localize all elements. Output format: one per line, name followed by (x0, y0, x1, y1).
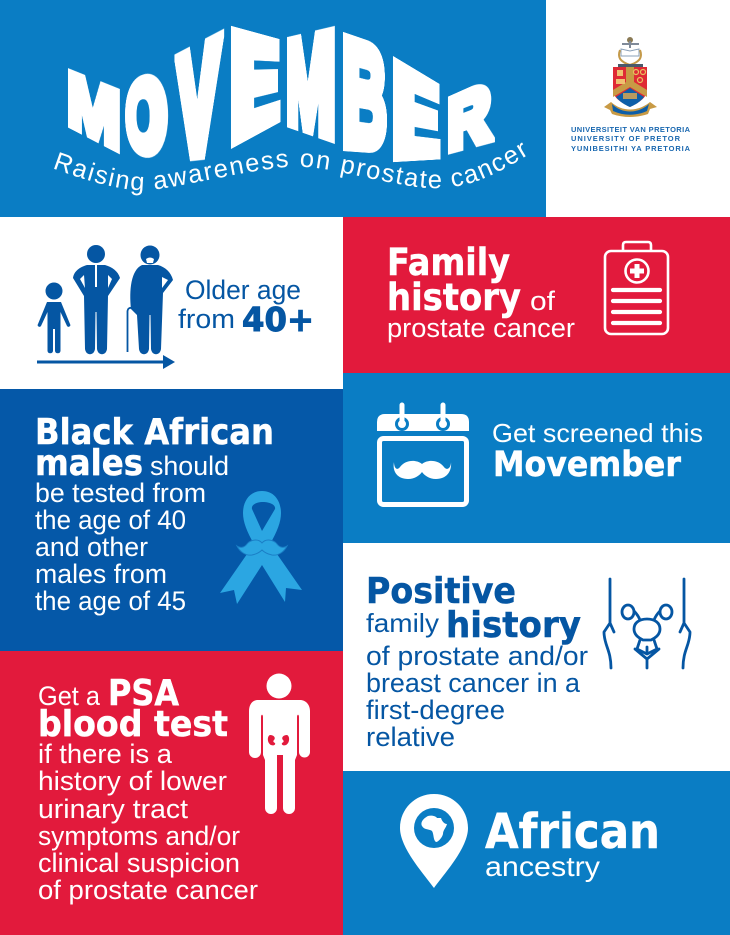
panel: university logo (546, 0, 730, 217)
text: testing age guidance: Black African (35, 412, 274, 453)
title: MOVEMBER warped lettering: M (67, 56, 121, 169)
text: first-degree relative: Positive (366, 571, 516, 612)
logo text: YUNIBESITHI YA PRETORIA (571, 144, 691, 153)
text: family history of prostate cancer: history (387, 276, 521, 319)
text: testing age guidance: the age of 45 (35, 586, 186, 616)
text: psa guidance: symptoms and/or (38, 821, 240, 851)
logo text (571, 125, 691, 153)
title: MOVEMBER warped lettering: R (448, 66, 490, 165)
text: psa guidance: PSA (108, 673, 179, 714)
text: older age from 40+: 40+ (242, 300, 314, 339)
title: MOVEMBER warped lettering: M (286, 0, 336, 169)
panel: black african males (0, 389, 343, 651)
text: first-degree relative: of prostate and/or (366, 641, 588, 671)
icon: map pin with africa (400, 794, 468, 888)
text: first-degree relative: breast cancer in a (366, 668, 581, 698)
text: psa guidance: urinary tract (38, 794, 189, 824)
text: psa guidance: if there is a (38, 739, 173, 769)
text: testing age guidance (35, 412, 274, 616)
text: get screened this movember (492, 418, 703, 485)
panel: family history (343, 217, 730, 373)
icon: prostate anatomy (604, 579, 690, 668)
text: psa guidance: clinical suspicion (38, 848, 240, 878)
text: older age from 40+ (178, 275, 314, 339)
text: first-degree relative: history (446, 605, 581, 646)
text: family history of prostate cancer (387, 241, 575, 343)
text: african ancestry: ancestry (485, 851, 600, 882)
text: family history of prostate cancer: of (530, 286, 556, 316)
icon: clipboard (605, 242, 668, 334)
text: testing age guidance: be tested from (35, 478, 206, 508)
panel: positive family history (343, 543, 730, 771)
text: psa guidance (38, 673, 258, 905)
subtitle: Raising awareness on prostate cancer (54, 142, 526, 196)
text: african ancestry (485, 804, 660, 882)
logo text: UNIVERSITY OF PRETOR (571, 134, 681, 143)
text: first-degree relative: first-degree (366, 695, 505, 725)
panel: header (0, 0, 546, 217)
text: get screened this movember: Get screened this (492, 418, 703, 448)
text: first-degree relative: relative (366, 722, 455, 752)
text: psa guidance: Get a (38, 681, 101, 711)
title: MOVEMBER warped lettering: O (126, 51, 166, 181)
text: family history of prostate cancer: Family (387, 241, 510, 284)
text: older age from 40+: from (178, 304, 235, 334)
text: first-degree relative: family (366, 608, 439, 638)
icon: human body with kidneys (249, 674, 310, 814)
title: MOVEMBER warped lettering: E (391, 32, 440, 185)
icon: ribbon with moustache (220, 491, 302, 604)
title: MOVEMBER warped lettering: V (178, 9, 219, 182)
text: testing age guidance: males from (35, 559, 167, 589)
text: psa guidance: of prostate cancer (38, 875, 258, 905)
panel: african ancestry (343, 771, 730, 935)
text: psa guidance: blood test (38, 704, 228, 745)
panel: psa blood test (0, 651, 343, 935)
panel: get screened (343, 373, 730, 543)
text: testing age guidance: males (35, 443, 143, 484)
text: older age from 40+: Older age (185, 275, 301, 305)
title: MOVEMBER warped lettering: E (229, 0, 280, 176)
icon: crest (604, 37, 657, 117)
title: MOVEMBER warped lettering: B (342, 6, 387, 177)
text: first-degree relative (366, 571, 588, 752)
title: MOVEMBER warped lettering (67, 0, 495, 185)
panel: older age (0, 217, 343, 389)
text: testing age guidance: should (150, 451, 229, 481)
text: family history of prostate cancer: prostate cancer (387, 313, 575, 343)
icon: three generations (37, 245, 175, 369)
text: african ancestry: African (485, 804, 660, 860)
icon: calendar with moustache (377, 405, 469, 504)
text: psa guidance: history of lower (38, 766, 227, 796)
text: testing age guidance: and other (35, 532, 148, 562)
text: testing age guidance: the age of 40 (35, 505, 186, 535)
logo text: UNIVERSITEIT VAN PRETORIA (571, 125, 691, 134)
text: get screened this movember: Movember (493, 445, 682, 485)
